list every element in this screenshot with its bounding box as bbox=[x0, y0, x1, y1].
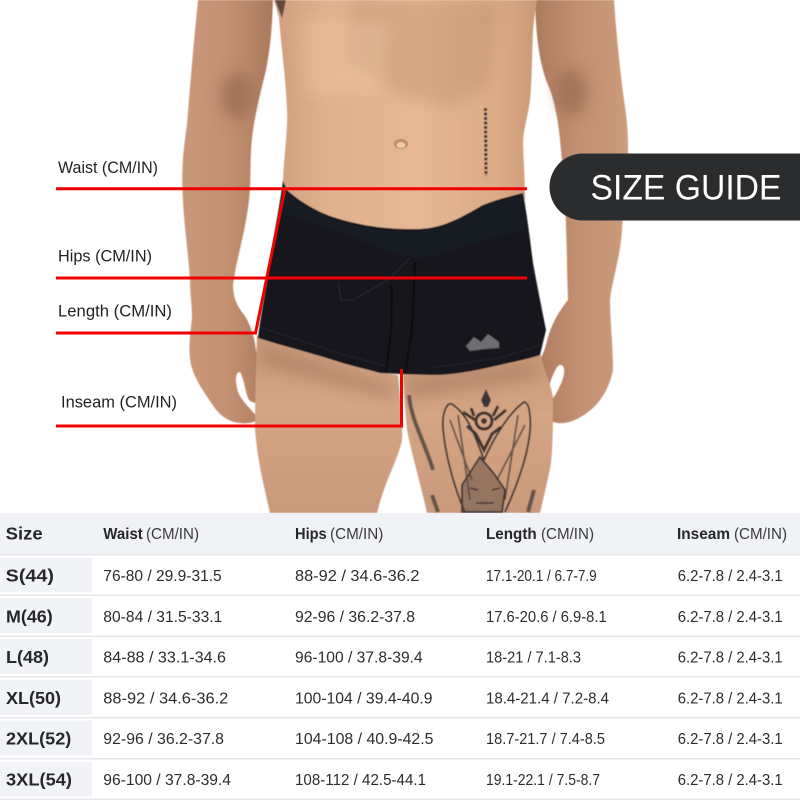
row S(44) bbox=[0, 558, 783, 592]
table header: Hips bbox=[295, 526, 327, 543]
table header: Waist bbox=[103, 526, 143, 543]
row 3XL(54): 96-100 / 37.8-39.4 bbox=[103, 772, 231, 789]
row S(44): 17.1-20.1 / 6.7-7.9 bbox=[486, 568, 597, 585]
torso bbox=[274, 0, 537, 240]
row 2XL(52) bbox=[0, 720, 783, 756]
inseam line bbox=[56, 369, 402, 426]
label: hips: Hips (CM/IN) bbox=[58, 248, 152, 266]
measurement labels bbox=[58, 159, 177, 412]
right arm and hand bbox=[530, 0, 628, 423]
badge title: SIZE GUIDE bbox=[590, 168, 782, 208]
row L(48): 18-21 / 7.1-8.3 bbox=[486, 650, 581, 666]
row XL(50): 18.4-21.4 / 7.2-8.4 bbox=[486, 690, 609, 707]
row 3XL(54): 3XL(54) bbox=[6, 770, 72, 790]
table header: (CM/IN) bbox=[330, 526, 383, 543]
photo: model wearing black trunks bbox=[182, 0, 628, 513]
row L(48): L(48) bbox=[6, 647, 49, 667]
row L(48) bbox=[0, 639, 783, 674]
row XL(50): 88-92 / 34.6-36.2 bbox=[103, 690, 228, 707]
legs bbox=[255, 335, 553, 513]
hips line bbox=[56, 276, 527, 280]
row L(48): 84-88 / 33.1-34.6 bbox=[103, 650, 226, 666]
label: length: Length (CM/IN) bbox=[58, 302, 172, 320]
thigh tattoo bbox=[409, 389, 534, 512]
measurement lines bbox=[56, 189, 527, 426]
row XL(50): XL(50) bbox=[6, 688, 61, 708]
row XL(50) bbox=[0, 680, 783, 715]
table header: Size bbox=[6, 524, 43, 544]
table header bbox=[0, 513, 800, 554]
row M(46): 6.2-7.8 / 2.4-3.1 bbox=[678, 609, 783, 626]
row S(44): 76-80 / 29.9-31.5 bbox=[103, 568, 222, 585]
row 3XL(54) bbox=[0, 762, 783, 796]
row S(44): 88-92 / 34.6-36.2 bbox=[295, 568, 420, 585]
row S(44): 6.2-7.8 / 2.4-3.1 bbox=[678, 568, 783, 585]
row XL(50): 6.2-7.8 / 2.4-3.1 bbox=[678, 690, 783, 707]
row L(48): 96-100 / 37.8-39.4 bbox=[295, 650, 423, 666]
abdomen tattoo bbox=[484, 108, 488, 176]
table header: Length bbox=[486, 526, 537, 543]
row 2XL(52): 2XL(52) bbox=[6, 728, 71, 748]
table header: (CM/IN) bbox=[734, 526, 787, 543]
row 2XL(52): 18.7-21.7 / 7.4-8.5 bbox=[486, 731, 605, 748]
row 3XL(54): 19.1-22.1 / 7.5-8.7 bbox=[486, 772, 600, 789]
row 2XL(52): 104-108 / 40.9-42.5 bbox=[295, 731, 434, 748]
size table bbox=[0, 513, 800, 800]
table header: Inseam bbox=[677, 526, 730, 543]
label: inseam: Inseam (CM/IN) bbox=[61, 394, 177, 412]
row L(48): 6.2-7.8 / 2.4-3.1 bbox=[678, 650, 783, 666]
trunks logo bbox=[466, 334, 499, 351]
row M(46): M(46) bbox=[6, 606, 53, 626]
table header: (CM/IN) bbox=[146, 526, 199, 543]
row M(46): 80-84 / 31.5-33.1 bbox=[103, 609, 222, 626]
row 3XL(54): 6.2-7.8 / 2.4-3.1 bbox=[678, 772, 783, 789]
row M(46) bbox=[0, 598, 783, 633]
row 2XL(52): 6.2-7.8 / 2.4-3.1 bbox=[678, 731, 783, 748]
row 2XL(52): 92-96 / 36.2-37.8 bbox=[103, 731, 224, 748]
table header: (CM/IN) bbox=[541, 526, 594, 543]
row M(46): 17.6-20.6 / 6.9-8.1 bbox=[486, 609, 607, 626]
label: waist: Waist (CM/IN) bbox=[58, 159, 158, 177]
row 3XL(54): 108-112 / 42.5-44.1 bbox=[295, 772, 426, 789]
row M(46): 92-96 / 36.2-37.8 bbox=[295, 609, 415, 626]
icon: navel bbox=[394, 139, 408, 149]
length line bbox=[56, 189, 285, 333]
waist line bbox=[56, 187, 527, 190]
size guide badge bbox=[550, 154, 800, 220]
row XL(50): 100-104 / 39.4-40.9 bbox=[295, 690, 432, 707]
left arm and hand bbox=[182, 0, 273, 423]
black trunks bbox=[258, 181, 546, 375]
row S(44): S(44) bbox=[6, 566, 54, 586]
